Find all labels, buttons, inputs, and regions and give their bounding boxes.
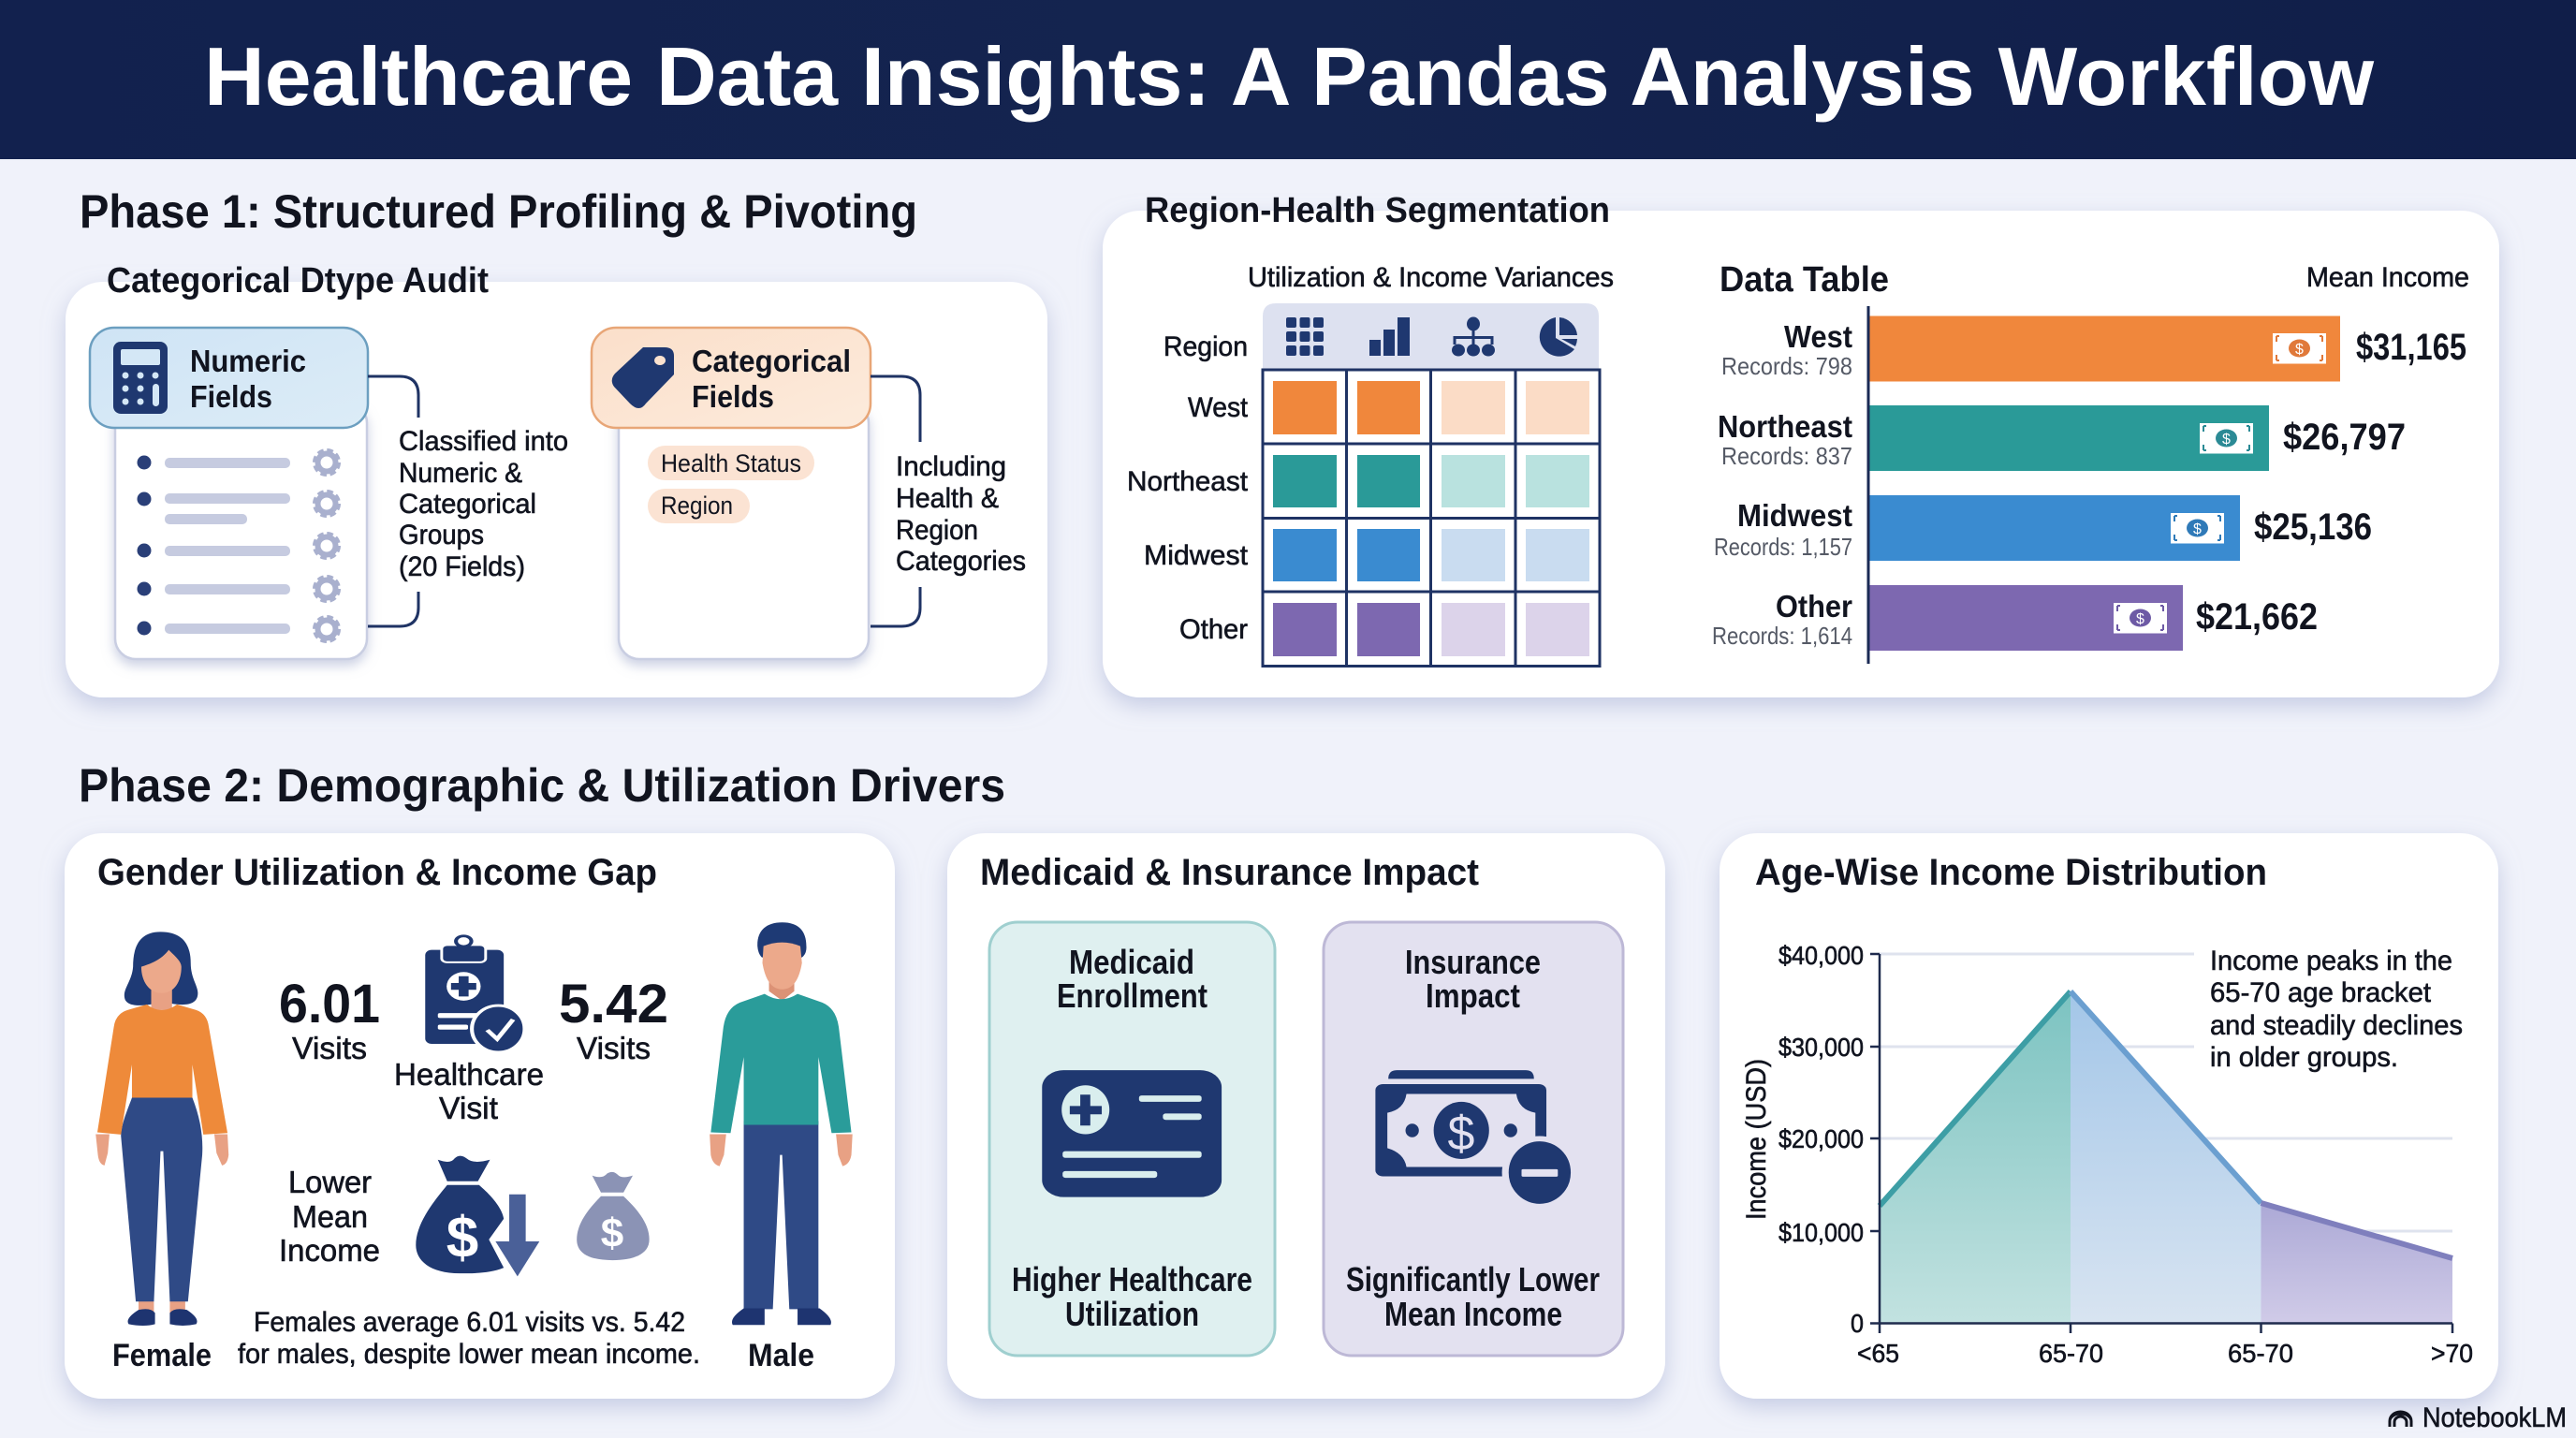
label: healthcare visit: Healthcare	[394, 1057, 544, 1092]
card caption	[1012, 1260, 1252, 1333]
arrow: categorical bracket	[871, 376, 920, 626]
bar: midwest: Midwest	[1737, 498, 1852, 533]
arrow: numeric bracket	[368, 376, 418, 626]
x-axis labels: 65-70	[2039, 1339, 2103, 1368]
heading: phase 2: Phase 2: Demographic & Utilization Drivers	[79, 759, 1005, 812]
heatmap row labels	[1127, 331, 1249, 645]
icon: money with minus	[1375, 1070, 1574, 1207]
bar: other: $21,662	[2196, 596, 2318, 638]
heatmap row labels: Midwest	[1144, 540, 1249, 571]
text: numeric note: Classified into	[399, 426, 568, 457]
label: healthcare visit	[394, 1057, 544, 1125]
label: lower mean income: Income	[279, 1233, 380, 1268]
callout: and steadily declines	[2210, 1010, 2463, 1041]
text: numeric note: Groups	[399, 520, 484, 550]
y-axis labels: $10,000	[1778, 1218, 1864, 1247]
x-axis labels: >70	[2431, 1339, 2473, 1368]
x-axis labels: <65	[1857, 1339, 1899, 1368]
heatmap row labels: Region	[1164, 331, 1248, 362]
pill: health status: Health Status	[661, 449, 801, 477]
bar: northeast: Northeast	[1718, 409, 1852, 444]
label: healthcare visit: Visit	[439, 1091, 498, 1125]
pill: region: Region	[661, 492, 733, 520]
y-axis labels: 0	[1851, 1309, 1864, 1338]
text: numeric note: Categorical	[399, 489, 536, 520]
label: lower mean income: Lower	[288, 1165, 372, 1199]
stat: female visits	[279, 974, 380, 1065]
area: teal segment	[1880, 991, 2071, 1324]
label: lower mean income: Mean	[292, 1199, 368, 1234]
text: categorical note: Including	[896, 451, 1006, 482]
heatmap table	[1263, 370, 1600, 667]
card heading	[1057, 943, 1208, 1015]
text: gender note: for males, despite lower mean income.	[238, 1339, 700, 1370]
data table heading: Data Table	[1720, 260, 1889, 300]
card: medicaid enrollment	[989, 922, 1275, 1356]
text: categorical note: Health &	[896, 483, 999, 514]
area: purple segment	[2261, 1203, 2452, 1324]
text: gender note: Females average 6.01 visits vs. 5.42	[254, 1307, 685, 1338]
panel: categorical dtype audit	[66, 261, 1047, 697]
panel: region-health segmentation	[1103, 191, 2499, 697]
bar: west: West	[1784, 319, 1852, 354]
text: gender note	[238, 1307, 700, 1370]
icon: bars	[1369, 317, 1410, 356]
numeric fields header	[90, 328, 368, 428]
card heading: Medicaid	[1069, 943, 1194, 981]
bar: west: $	[2295, 342, 2304, 358]
panel title: Gender Utilization & Income Gap	[97, 852, 657, 893]
header banner	[0, 0, 2576, 159]
icon: insurance card	[1042, 1070, 1222, 1197]
card heading: Impact	[1426, 976, 1520, 1015]
categorical fields header	[592, 328, 871, 428]
area chart	[1741, 941, 2473, 1368]
mean income heading: Mean Income	[2306, 262, 2469, 293]
icon: notebooklm	[2390, 1412, 2411, 1427]
x-axis labels: 65-70	[2228, 1339, 2293, 1368]
label: male: Male	[748, 1338, 814, 1373]
icon: grid	[1286, 317, 1324, 356]
categorical fields header: Fields	[692, 379, 774, 414]
y-axis labels: $40,000	[1778, 941, 1864, 970]
text: numeric note: (20 Fields)	[399, 551, 525, 582]
text: categorical note: Region	[896, 515, 978, 546]
heatmap row labels: West	[1188, 392, 1249, 423]
figure: male	[710, 922, 853, 1325]
title: Healthcare Data Insights: A Pandas Analysis Workflow	[204, 30, 2375, 123]
bar: other	[1712, 585, 2318, 651]
panel title: Medicaid & Insurance Impact	[980, 852, 1479, 893]
bar: northeast	[1718, 405, 2406, 471]
card caption: Significantly Lower	[1346, 1260, 1600, 1299]
bar: other: Other	[1776, 589, 1852, 624]
icon: pie	[1540, 317, 1577, 357]
heatmap caption: Utilization & Income Variances	[1248, 262, 1614, 293]
callout	[2210, 946, 2463, 1073]
icon: money bag with down arrow: $	[446, 1206, 478, 1270]
text: numeric note	[399, 426, 568, 582]
y-axis labels: $30,000	[1778, 1033, 1864, 1062]
label: Numeric	[190, 344, 306, 378]
bar: west: Records: 798	[1721, 352, 1852, 380]
text: categorical note	[896, 451, 1026, 577]
icon: tag	[612, 347, 674, 408]
label: lower mean income	[279, 1165, 380, 1268]
card caption: Mean Income	[1384, 1295, 1562, 1333]
categorical fields card	[619, 403, 869, 659]
card: insurance impact	[1324, 922, 1623, 1356]
icon: calculator	[113, 342, 168, 414]
heatmap header	[1263, 303, 1599, 370]
y-axis labels: $20,000	[1778, 1124, 1864, 1153]
bar: northeast: $	[2222, 432, 2231, 448]
callout: 65-70 age bracket	[2210, 977, 2432, 1008]
bar: northeast: Records: 837	[1721, 442, 1852, 470]
text: numeric note: Numeric &	[399, 458, 522, 489]
pill: region	[648, 489, 750, 523]
stat: female visits: Visits	[292, 1031, 367, 1065]
icon: money with minus: $	[1448, 1107, 1475, 1161]
icon: money bag with down arrow	[416, 1156, 539, 1276]
card heading: Insurance	[1405, 943, 1541, 981]
card caption: Utilization	[1065, 1295, 1199, 1333]
bar: midwest: $	[2193, 521, 2202, 537]
bar: other: Records: 1,614	[1712, 622, 1852, 650]
card caption	[1346, 1260, 1600, 1333]
numeric fields list card	[115, 403, 367, 659]
panel: medicaid and insurance	[947, 833, 1665, 1399]
bar: northeast: $26,797	[2283, 417, 2406, 458]
bar: west: $31,165	[2356, 327, 2466, 368]
bar: midwest: $25,136	[2254, 506, 2372, 548]
stat: male visits: 5.42	[559, 974, 668, 1034]
icon: hierarchy	[1452, 316, 1495, 356]
stat: male visits: Visits	[577, 1031, 651, 1065]
panel title: Categorical Dtype Audit	[107, 261, 489, 301]
figure: female	[95, 932, 228, 1326]
icon: clipboard	[425, 936, 524, 1052]
icon: small money bag: $	[601, 1211, 623, 1256]
bar chart	[1712, 306, 2466, 664]
heatmap row labels: Northeast	[1127, 466, 1249, 497]
panel: gender utilization	[65, 833, 895, 1399]
area: blue segment	[2071, 991, 2261, 1324]
panel title: Age-Wise Income Distribution	[1755, 852, 2267, 893]
panel: age-wise income	[1720, 833, 2498, 1399]
y-axis labels	[1778, 941, 1864, 1338]
icon: small money bag	[577, 1172, 650, 1260]
label: female: Female	[112, 1338, 212, 1373]
card caption: Higher Healthcare	[1012, 1260, 1252, 1299]
bar: midwest: Records: 1,157	[1714, 533, 1852, 561]
heatmap row labels: Other	[1179, 614, 1248, 645]
x-axis labels	[1857, 1339, 2473, 1368]
callout: Income peaks in the	[2210, 946, 2452, 976]
callout: in older groups.	[2210, 1042, 2398, 1073]
stat: female visits: 6.01	[279, 974, 380, 1034]
stat: male visits	[559, 974, 668, 1065]
bar: west	[1721, 316, 2466, 382]
card heading	[1405, 943, 1541, 1015]
text: categorical note: Categories	[896, 546, 1026, 577]
axes	[1870, 954, 2452, 1333]
bar: other: $	[2136, 611, 2144, 627]
y-axis title: Income (USD)	[1741, 1059, 1772, 1220]
label: Categorical	[692, 344, 851, 378]
heading: phase 1: Phase 1: Structured Profiling & Pivoting	[80, 185, 917, 238]
bar: midwest	[1714, 495, 2372, 561]
card heading: Enrollment	[1057, 976, 1208, 1015]
numeric fields header: Fields	[190, 379, 272, 414]
panel title: Region-Health Segmentation	[1145, 191, 1610, 230]
